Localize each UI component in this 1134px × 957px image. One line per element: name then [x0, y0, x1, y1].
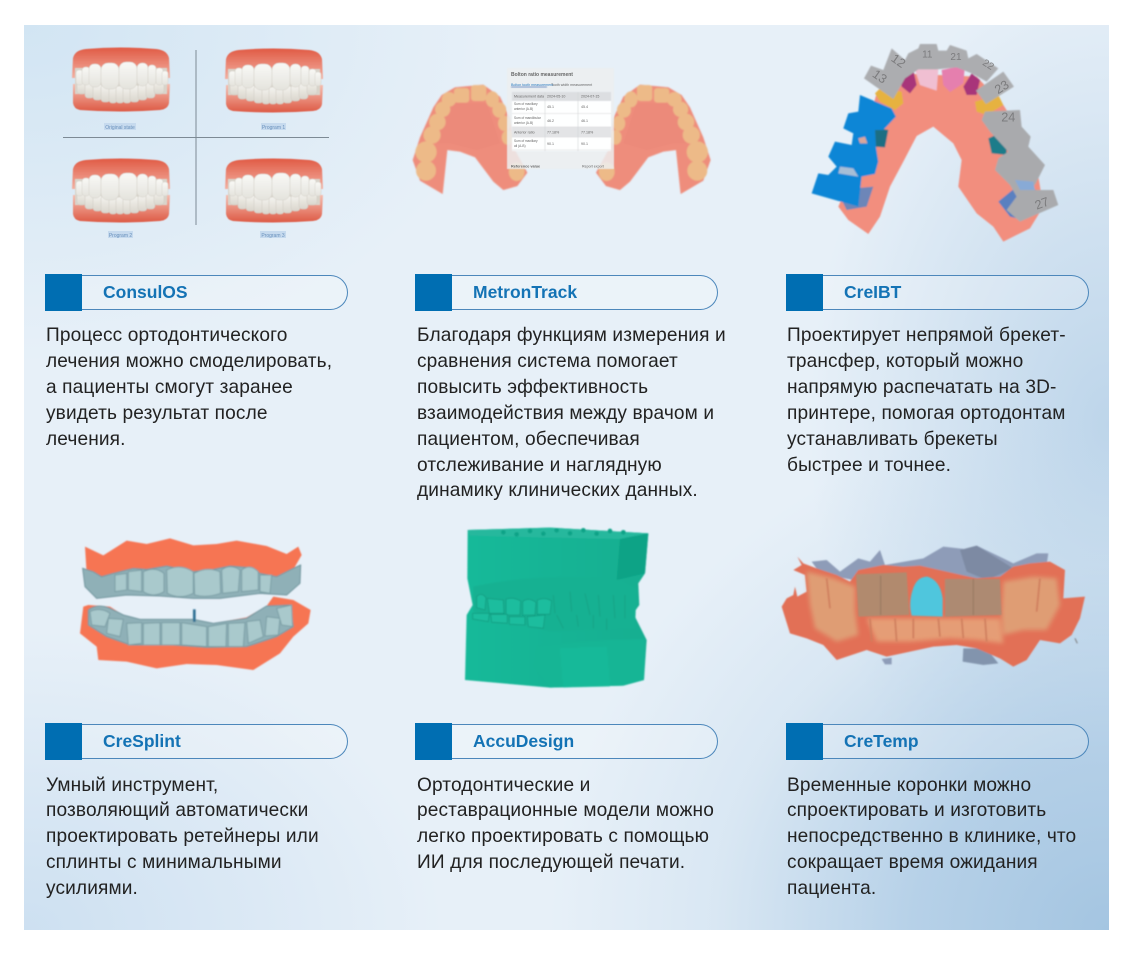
- header: CreTemp: CreTemp: [844, 731, 919, 751]
- illustration: CreIBT bracket transfer: [812, 44, 1058, 242]
- illustration: MetronTrack arches and measurement table: 90.1: [547, 142, 554, 146]
- text: CreIBT description: устанавливать брекеты: [787, 429, 998, 450]
- text: CreSplint description: усилиями.: [46, 878, 138, 899]
- header: CreTemp: [786, 723, 1089, 760]
- illustration: MetronTrack arches and measurement table: Bolton tooth measurement: [511, 83, 553, 87]
- text: CreSplint description: проектировать ретейнеры или: [46, 826, 319, 847]
- illustration: CreTemp temporary crown: [782, 546, 1085, 667]
- text: ConsulOS description: Процесс ортодонтического: [46, 325, 288, 346]
- text: CreTemp description: пациента.: [787, 878, 876, 899]
- text: AccuDesign description: Ортодонтические и: [417, 774, 590, 796]
- illustration: MetronTrack arches and measurement table: Sum of maxillary: [514, 139, 538, 143]
- text: MetronTrack description: сравнения система помогает: [417, 351, 678, 372]
- illustration: ConsulOS four treatment plans: Program 3: [261, 233, 285, 239]
- illustration: MetronTrack arches and measurement table: 2024-05-10: [547, 94, 565, 98]
- illustration: MetronTrack arches and measurement table: Tooth width measurement: [551, 83, 592, 87]
- illustration: MetronTrack arches and measurement table: anterior (A-B): [514, 121, 533, 125]
- text: MetronTrack description: Благодаря функциям измерения и: [417, 325, 726, 346]
- text: ConsulOS description: [46, 325, 332, 450]
- text: AccuDesign description: реставрационные модели можно: [417, 800, 714, 821]
- text: MetronTrack description: взаимодействия между врачом и: [417, 403, 714, 424]
- header: AccuDesign: AccuDesign: [473, 731, 574, 751]
- illustration: MetronTrack arches and measurement table: Bolton ratio measurement: [511, 72, 573, 78]
- illustration: CreIBT bracket transfer: 13: [870, 67, 889, 86]
- header: MetronTrack: [415, 274, 718, 311]
- illustration: MetronTrack arches and measurement table: 46.1: [581, 119, 588, 123]
- text: ConsulOS description: увидеть результат после: [46, 403, 268, 424]
- illustration: ConsulOS four treatment plans: [63, 48, 329, 239]
- illustration: MetronTrack arches and measurement table: Anterior ratio: [514, 130, 535, 134]
- illustration: CreIBT bracket transfer: 27: [1033, 195, 1051, 213]
- illustration: MetronTrack arches and measurement table: Sum of maxillary: [514, 102, 538, 106]
- text: CreIBT description: напрямую распечатать на 3D-: [787, 377, 1056, 398]
- text: CreIBT description: [787, 325, 1066, 476]
- illustration: CreIBT bracket transfer: 12: [889, 51, 908, 71]
- illustration: MetronTrack arches and measurement table: 45.4: [581, 105, 588, 109]
- illustration: CreIBT bracket transfer: 22: [980, 58, 996, 73]
- header: CreIBT: CreIBT: [844, 282, 901, 302]
- text: AccuDesign description: ИИ для последующей печати.: [417, 852, 685, 873]
- text: MetronTrack description: повысить эффективность: [417, 377, 648, 398]
- illustration: MetronTrack arches and measurement table: 45.1: [547, 105, 554, 109]
- text: CreSplint description: позволяющий автоматически: [46, 800, 308, 821]
- illustration: CreIBT bracket transfer: 24: [1001, 111, 1015, 125]
- text: ConsulOS description: а пациенты смогут заранее: [46, 377, 293, 398]
- text: CreSplint description: [46, 774, 319, 899]
- illustration: ConsulOS four treatment plans: Program 1: [262, 125, 285, 131]
- text: CreIBT description: принтере, помогая ортодонтам: [787, 403, 1065, 424]
- illustration: CreIBT bracket transfer: 21: [950, 52, 962, 63]
- text: MetronTrack description: [417, 325, 726, 501]
- illustration: MetronTrack arches and measurement table: Measurement data: [514, 94, 544, 98]
- illustration: MetronTrack arches and measurement table: 77.18%: [581, 130, 594, 134]
- text: CreTemp description: непосредственно в клинике, что: [787, 826, 1076, 847]
- text: CreTemp description: [787, 774, 1076, 899]
- illustration: MetronTrack arches and measurement table: Sum of mandibular: [514, 116, 542, 120]
- illustration: CreIBT bracket transfer: 23: [992, 78, 1012, 97]
- illustration: AccuDesign 3D model: [465, 528, 648, 688]
- illustration: MetronTrack arches and measurement table: Reference value: [511, 164, 540, 168]
- illustration: ConsulOS four treatment plans: Program 2: [109, 233, 132, 239]
- illustration: CreIBT bracket transfer: 11: [922, 49, 933, 60]
- text: AccuDesign description: легко проектировать с помощью: [417, 826, 709, 847]
- header: AccuDesign: [415, 723, 718, 760]
- header: ConsulOS: ConsulOS: [103, 282, 188, 302]
- text: CreIBT description: Проектирует непрямой брекет-: [787, 325, 1066, 346]
- illustration: MetronTrack arches and measurement table: 77.18%: [547, 130, 560, 134]
- text: CreIBT description: трансфер, который можно: [787, 351, 1023, 372]
- header: CreIBT: [786, 274, 1089, 311]
- illustration: MetronTrack arches and measurement table: all (A-B): [514, 144, 526, 148]
- header: CreSplint: [45, 723, 348, 760]
- illustration: MetronTrack arches and measurement table: [413, 68, 711, 194]
- text: CreTemp description: Временные коронки можно: [787, 774, 1031, 796]
- header: ConsulOS: [45, 274, 348, 311]
- text: CreSplint description: сплинты с минимальными: [46, 852, 282, 873]
- text: CreTemp description: сокращает время ожидания: [787, 852, 1038, 873]
- text: ConsulOS description: лечения можно смоделировать,: [46, 351, 332, 372]
- text: CreIBT description: быстрее и точнее.: [787, 455, 951, 476]
- text: MetronTrack description: отслеживание и наглядную: [417, 455, 662, 476]
- illustration: MetronTrack arches and measurement table: anterior (A-B): [514, 107, 533, 111]
- illustration: MetronTrack arches and measurement table: 90.1: [581, 142, 588, 146]
- illustration: MetronTrack arches and measurement table: 2024-07-15: [581, 94, 599, 98]
- text: AccuDesign description: [417, 774, 714, 873]
- text: MetronTrack description: пациентом, обеспечивая: [417, 429, 640, 450]
- illustration: CreSplint retainers on scans: [80, 538, 311, 670]
- text: MetronTrack description: динамику клинических данных.: [417, 480, 698, 501]
- header: MetronTrack: MetronTrack: [473, 282, 577, 302]
- header: CreSplint: CreSplint: [103, 731, 181, 751]
- text: CreTemp description: спроектировать и изготовить: [787, 800, 1046, 821]
- text: CreSplint description: Умный инструмент,: [46, 774, 218, 796]
- illustration: MetronTrack arches and measurement table: Report export: [582, 164, 604, 168]
- text: ConsulOS description: лечения.: [46, 429, 126, 450]
- illustration: ConsulOS four treatment plans: Original state: [105, 125, 135, 131]
- illustration: MetronTrack arches and measurement table: 46.2: [547, 119, 554, 123]
